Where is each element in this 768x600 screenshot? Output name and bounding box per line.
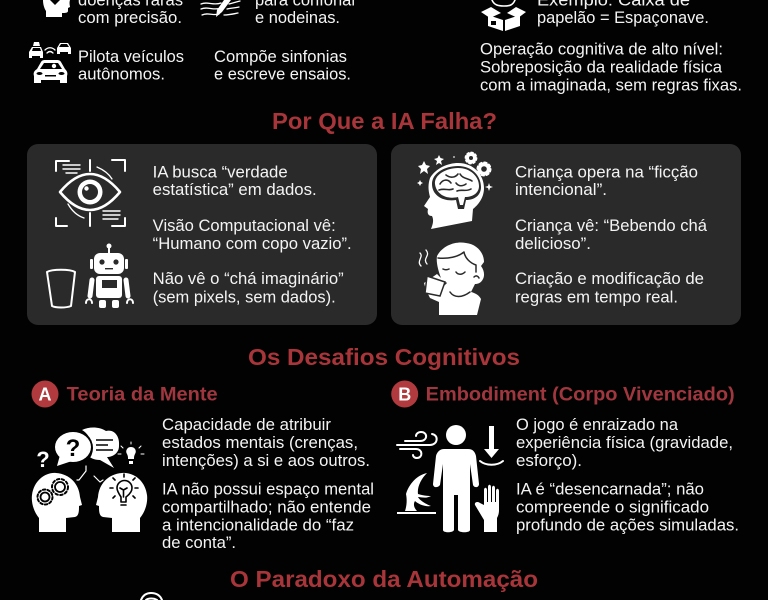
text: child fiction: Criança opera na “ficção — [515, 163, 698, 181]
heading: why AI fails: Por Que a IA Falha? — [272, 108, 497, 134]
text: theory of mind description: compartilhado; não entende — [162, 499, 371, 517]
text: theory of mind description: IA não possui espaço mental — [162, 480, 374, 498]
badge B: B — [398, 384, 411, 404]
text: high level cognitive operation: Operação cognitiva de alto nível: — [480, 41, 723, 59]
text: child fiction: Criança vê: “Bebendo chá — [515, 217, 708, 235]
subheading: embodiment: Embodiment (Corpo Vivenciado) — [426, 385, 735, 406]
text: child fiction — [515, 163, 708, 307]
text: composes symphonies — [214, 48, 351, 84]
text: high level cognitive operation — [480, 41, 742, 94]
icon: child head with brain — [417, 152, 493, 229]
icon: autonomous cars — [29, 42, 71, 83]
text: AI statistics: “Humano com copo vazio”. — [153, 235, 352, 253]
text: composes symphonies: Compõe sinfonias — [214, 48, 347, 66]
text: theory of mind description: Capacidade de atribuir — [162, 416, 332, 434]
text: embodiment description: esforço). — [516, 452, 582, 470]
icon: robot — [86, 244, 133, 308]
top section: AI and human capabilities — [29, 0, 742, 94]
text: comfort and lullabies — [255, 0, 355, 27]
text: theory of mind description: a intencionalidade do “faz — [162, 517, 354, 535]
text: rare diseases — [78, 0, 183, 27]
panel: child — [391, 144, 741, 325]
text: AI statistics — [153, 163, 352, 307]
icon: human body with gravity and wind — [397, 425, 503, 532]
text: embodiment description: experiência física (gravidade, — [516, 434, 733, 452]
icon: two heads with speech bubbles: ? — [36, 447, 50, 472]
icon: cardboard box — [481, 0, 526, 31]
text: high level cognitive operation: Sobreposição da realidade física — [480, 59, 723, 77]
text: box example: papelão = Espaçonave. — [537, 9, 709, 27]
column: theory of mind — [32, 380, 374, 552]
text: AI statistics: (sem pixels, sem dados). — [153, 289, 336, 307]
text: AI statistics: Visão Computacional vê: — [153, 217, 336, 235]
text: composes symphonies: e escreve ensaios. — [214, 66, 351, 84]
heading: automation paradox: O Paradoxo da Automação — [230, 566, 538, 592]
text: high level cognitive operation: com a imaginada, sem regras fixas. — [480, 76, 742, 94]
panel: AI — [27, 144, 377, 325]
text: child fiction: Criação e modificação de — [515, 270, 704, 288]
text: theory of mind description — [162, 416, 374, 552]
text: pilots vehicles: autônomos. — [78, 66, 165, 84]
text: box example — [537, 0, 709, 27]
text: child fiction: delicioso”. — [515, 235, 591, 253]
text: theory of mind description: de conta”. — [162, 534, 236, 552]
text: theory of mind description: estados mentais (crenças, — [162, 434, 358, 452]
text: AI statistics: IA busca “verdade — [153, 163, 288, 181]
heading: cognitive challenges: Os Desafios Cognitivos — [248, 344, 520, 370]
icon: two heads with speech bubbles — [32, 427, 147, 532]
text: embodiment description: IA é “desencarnada”; não — [516, 480, 704, 498]
icon: computer vision eye — [56, 160, 125, 226]
icon: feather pen writing — [201, 0, 240, 17]
text: embodiment description — [516, 416, 739, 535]
subheading: theory of mind: Teoria da Mente — [67, 385, 218, 406]
text: theory of mind description: intenções) a si e aos outros. — [162, 452, 370, 470]
badge A: A — [38, 384, 52, 404]
text: child fiction: regras em tempo real. — [515, 289, 678, 307]
text: embodiment description: O jogo é enraizado na — [516, 416, 679, 434]
text: AI statistics: Não vê o “chá imaginário” — [153, 270, 344, 288]
badge A — [32, 380, 58, 408]
text: embodiment description: profundo de ações simuladas. — [516, 517, 739, 535]
icon: diagnostic head — [43, 0, 70, 17]
icon: boy drinking — [419, 243, 484, 315]
icon: two heads with speech bubbles: ? — [66, 435, 80, 462]
text: AI statistics: estatística” em dados. — [153, 181, 317, 199]
icon: gear top edge — [141, 593, 162, 600]
text: rare diseases: com precisão. — [78, 9, 182, 27]
column: embodiment — [391, 380, 739, 535]
text: child fiction: intencional”. — [515, 181, 607, 199]
badge B — [391, 380, 418, 408]
text: embodiment description: compreende o significado — [516, 499, 709, 517]
text: pilots vehicles: Pilota veículos — [78, 48, 184, 66]
text: comfort and lullabies: e nodeinas. — [255, 9, 340, 27]
text: pilots vehicles — [78, 48, 184, 84]
icon: empty cup — [47, 270, 75, 308]
